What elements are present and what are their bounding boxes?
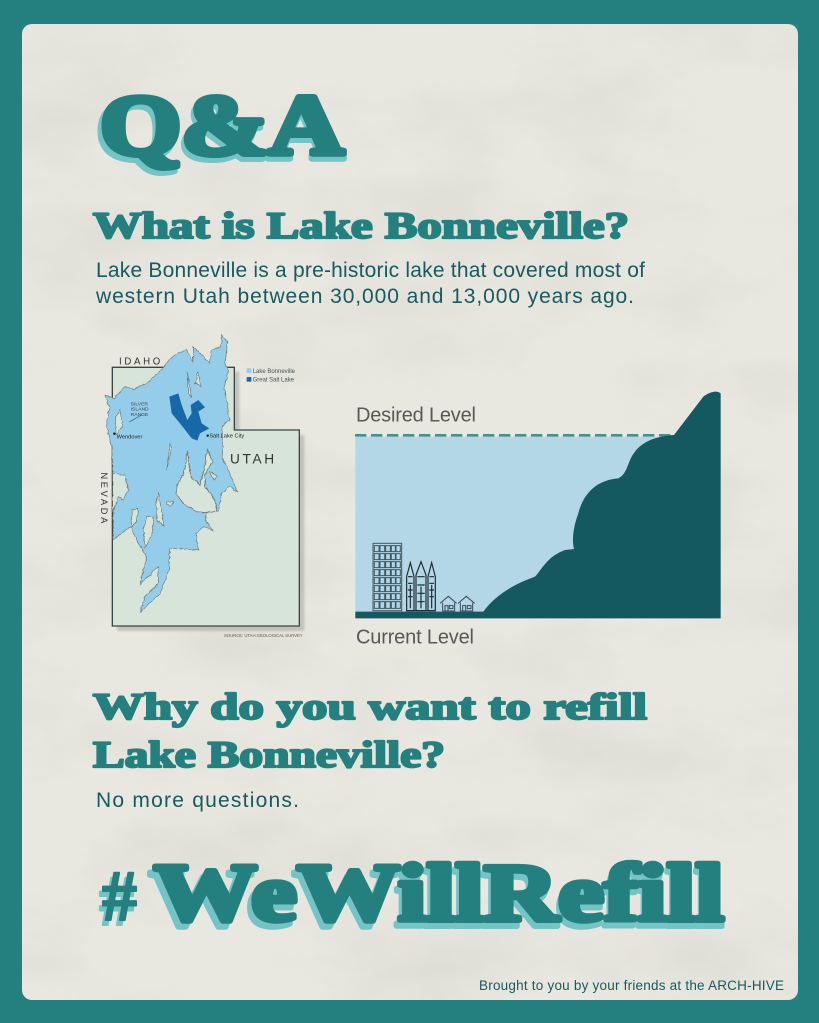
map: Silver Island Range label: SILVER — [131, 401, 148, 407]
map: Silver Island Range label: RANGE — [131, 412, 149, 418]
map: Idaho label: IDAHO — [119, 356, 163, 367]
answer text: Lake Bonneville description — [95, 259, 645, 308]
chart: dashed desired level line — [355, 431, 673, 439]
chart: office tower — [373, 543, 402, 611]
answer text: no more questions: No more questions. — [96, 789, 299, 812]
chart: mountain silhouette — [355, 392, 721, 618]
hashtag: #WeWillRefill: # — [102, 856, 137, 936]
chart: desired level label: Desired Level — [356, 405, 476, 427]
answer text: Lake Bonneville description: western Utah between 30,000 and 13,000 years ago. — [95, 285, 634, 308]
map: legend: Great Salt Lake — [253, 378, 295, 384]
credit line: Brought to you by your friends at the ARCH-HIVE — [479, 978, 784, 993]
heading: Why do you want to refill Lake Bonneville? — [93, 687, 647, 776]
map: source note: SOURCE: UTAH GEOLOGICAL SURVEY — [224, 633, 303, 638]
map: Great Salt Lake — [169, 393, 209, 441]
map: Utah shadow — [117, 372, 304, 631]
map: Utah label: UTAH — [230, 451, 277, 466]
hashtag: #WeWillRefill: # — [99, 861, 134, 941]
map: ancient lake extent — [105, 335, 237, 613]
hashtag: #WeWillRefill — [99, 847, 724, 944]
map: Utah state outline — [112, 367, 299, 626]
heading: What is Lake Bonneville?: What is Lake Bonneville? — [93, 206, 629, 247]
heading: Why do you want to refill Lake Bonneville?: Why do you want to refill — [93, 687, 647, 728]
title: Q&A: Q&A — [100, 77, 344, 173]
hashtag: #WeWillRefill: WeWillRefill — [154, 847, 724, 938]
map: Silver Island Range label: ISLAND — [131, 407, 149, 413]
map: Wendover marker — [113, 432, 142, 441]
chart: current level label: Current Level — [356, 626, 474, 648]
chart: water area — [355, 437, 689, 613]
map: legend — [247, 368, 296, 384]
map: Silver Island Range label — [129, 401, 149, 422]
heading: Why do you want to refill Lake Bonneville?: Lake Bonneville? — [93, 735, 445, 776]
map: Lake Bonneville in Utah — [99, 335, 304, 638]
map: Nevada label: NEVADA — [99, 472, 109, 526]
map: Salt Lake City marker: Salt Lake City — [209, 434, 244, 440]
hashtag: #WeWillRefill: WeWillRefill — [149, 853, 723, 944]
map: Wendover marker: Wendover — [117, 435, 142, 441]
chart: temple — [407, 562, 435, 611]
map: legend: Lake Bonneville — [253, 369, 296, 375]
chart: lake level diagram — [355, 392, 721, 648]
title: Q&A: Q&A — [96, 82, 344, 178]
answer text: Lake Bonneville description: Lake Bonneville is a pre-historic lake that covered most of — [96, 259, 645, 282]
chart: houses — [440, 596, 475, 611]
